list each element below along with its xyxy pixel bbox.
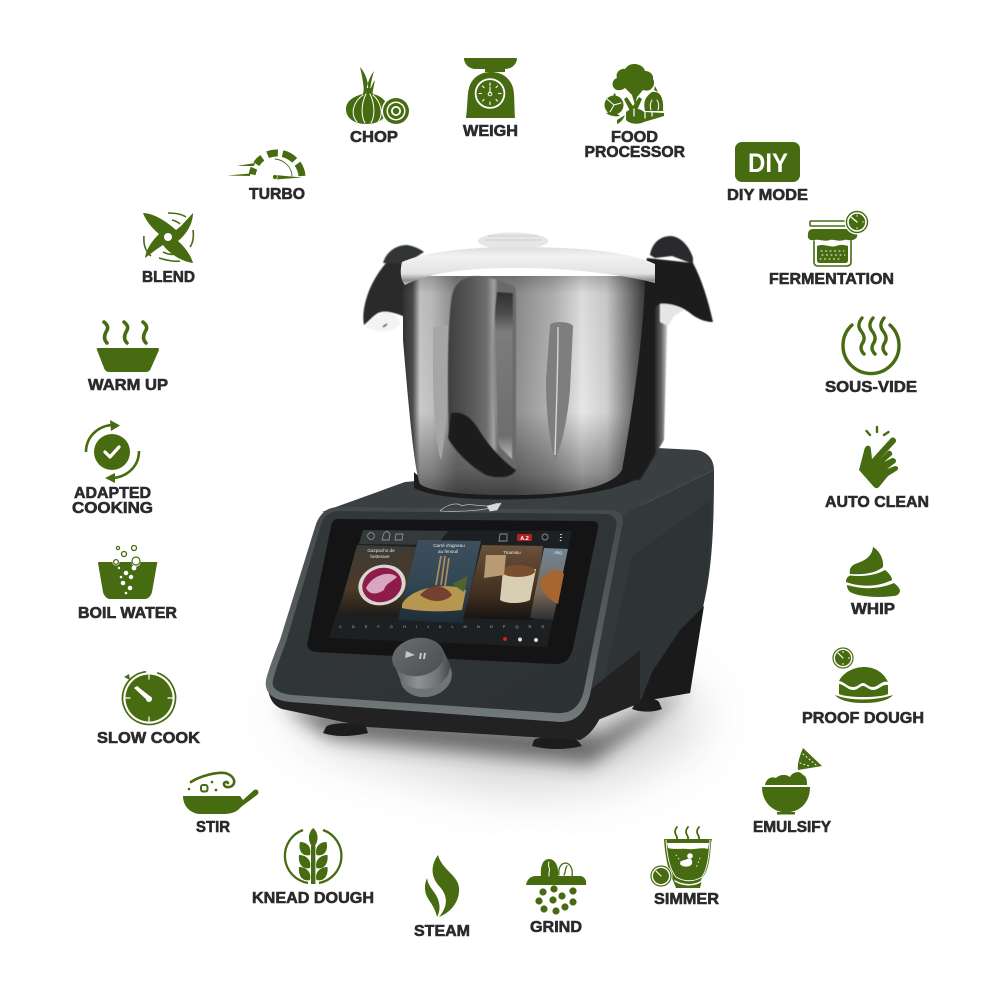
bowl dark base ring <box>414 468 638 499</box>
feature: boil water <box>78 546 177 622</box>
icon: whipped cream <box>846 547 900 597</box>
recipe card: dessert: Alig <box>554 550 562 555</box>
icon: diy badge: DIY <box>748 148 788 178</box>
control knob <box>389 634 455 701</box>
icon: coffee beans through sieve <box>526 859 586 915</box>
icon: timer clock <box>116 665 182 731</box>
label: adapted cooking <box>72 485 153 517</box>
feature: warm up <box>88 322 168 394</box>
label: boil water: BOIL WATER <box>78 605 177 622</box>
icon: steam flames <box>425 855 459 917</box>
index dots <box>503 637 538 642</box>
icon: kitchen scale <box>464 58 517 118</box>
feature: adapted cooking <box>72 420 153 517</box>
recipe card: lamb: au fenouil <box>438 549 458 554</box>
label: steam: STEAM <box>414 923 470 940</box>
screen bezel <box>307 519 598 664</box>
transparent lid <box>401 247 655 285</box>
recipe card: soup: Gazpacho de <box>367 548 395 553</box>
label: proof dough: PROOF DOUGH <box>802 710 924 727</box>
icon: blender blade <box>143 213 193 263</box>
label: weigh: WEIGH <box>463 123 518 140</box>
recipe card: tiramisu: Tiramisu <box>503 550 521 555</box>
play and pause symbols <box>405 651 426 659</box>
icon: bowl with chip <box>762 748 822 814</box>
feature: food processor <box>584 64 685 161</box>
icon: frying pan <box>183 773 258 814</box>
alphabet index: C D E F G H I J K L M N O P Q R S <box>339 624 544 629</box>
floor shadow <box>280 685 700 786</box>
label: blend: BLEND <box>142 269 195 286</box>
recipe card: lamb: Carré d'agneau <box>433 543 465 548</box>
feature: emulsify <box>753 748 831 836</box>
label: chop: CHOP <box>350 129 398 146</box>
screen top bar icons <box>368 531 548 541</box>
feature: diy mode <box>727 142 808 204</box>
menu dots <box>560 534 562 541</box>
label: grind: GRIND <box>530 919 582 936</box>
icon: vegetables <box>604 64 664 124</box>
icon: dough with timer <box>833 648 893 703</box>
feature: blend <box>142 213 195 286</box>
label: auto clean: AUTO CLEAN <box>825 494 929 511</box>
feature: knead dough <box>252 828 374 907</box>
machine side <box>560 470 714 732</box>
lid knob <box>478 232 548 250</box>
icon: onion <box>346 67 410 126</box>
feature: steam <box>414 855 470 940</box>
feature: grind <box>526 859 586 936</box>
feature: auto clean <box>825 427 929 511</box>
recipe card: soup: betterave <box>370 554 390 559</box>
label: adapted cooking: COOKING <box>72 500 153 517</box>
label: fermentation: FERMENTATION <box>769 271 894 288</box>
feature: simmer <box>650 827 719 908</box>
feature: slow cook <box>97 665 200 747</box>
front panel rim <box>266 507 623 722</box>
product: cooking machine <box>266 232 714 786</box>
label: knead dough: KNEAD DOUGH <box>252 890 374 907</box>
label: food processor <box>584 129 685 161</box>
auto badge <box>517 534 532 542</box>
bowl side grips <box>363 236 713 480</box>
label: food processor: FOOD <box>611 129 658 146</box>
recipe card: dessert <box>530 548 568 620</box>
label: diy mode: DIY MODE <box>727 187 808 204</box>
machine feet <box>323 698 662 749</box>
machine lower lip <box>268 650 640 740</box>
feature: proof dough <box>802 648 924 727</box>
auto badge: A.2 <box>520 536 529 542</box>
feature: fermentation <box>769 210 894 288</box>
icon: speedometer <box>227 153 302 180</box>
label: food processor: PROCESSOR <box>584 144 685 161</box>
icon: steam in circle <box>843 318 899 374</box>
label: slow cook: SLOW COOK <box>97 730 200 747</box>
icon: pot with bubbles <box>98 546 157 599</box>
label: simmer: SIMMER <box>654 891 719 908</box>
bowl right slot <box>546 322 573 459</box>
icon: pot with timer <box>650 827 712 888</box>
label: whip: WHIP <box>851 601 895 618</box>
bowl left slot <box>433 325 448 460</box>
warning mark <box>452 451 470 468</box>
feature: whip <box>846 547 900 618</box>
recipe card: soup <box>338 545 417 617</box>
recipe card: lamb <box>398 540 481 623</box>
label: sous-vide: SOUS-VIDE <box>825 379 917 396</box>
icon: check with cycle arrows <box>86 420 139 483</box>
logo signature <box>440 503 501 511</box>
label: adapted cooking: ADAPTED <box>74 485 151 502</box>
feature: chop <box>346 67 410 146</box>
feature: weigh <box>463 58 518 140</box>
icon: snapping hand <box>859 427 898 488</box>
icon: wheat in circle <box>285 828 341 884</box>
label: turbo: TURBO <box>249 186 305 203</box>
front panel face <box>273 511 617 713</box>
touch screen <box>329 530 572 647</box>
icon: jar with timer <box>808 210 870 266</box>
label: warm up: WARM UP <box>88 377 168 394</box>
recipe card: tiramisu <box>463 545 543 620</box>
feature: turbo <box>227 153 305 203</box>
feature: stir <box>183 773 258 836</box>
label: stir: STIR <box>196 819 230 836</box>
feature: sous-vide <box>825 318 917 396</box>
icon: steaming dish <box>97 322 159 372</box>
label: emulsify: EMULSIFY <box>753 819 831 836</box>
bowl handle <box>448 276 516 478</box>
machine top surface <box>322 448 714 520</box>
screen top bar <box>359 530 448 545</box>
steel bowl <box>403 276 645 495</box>
